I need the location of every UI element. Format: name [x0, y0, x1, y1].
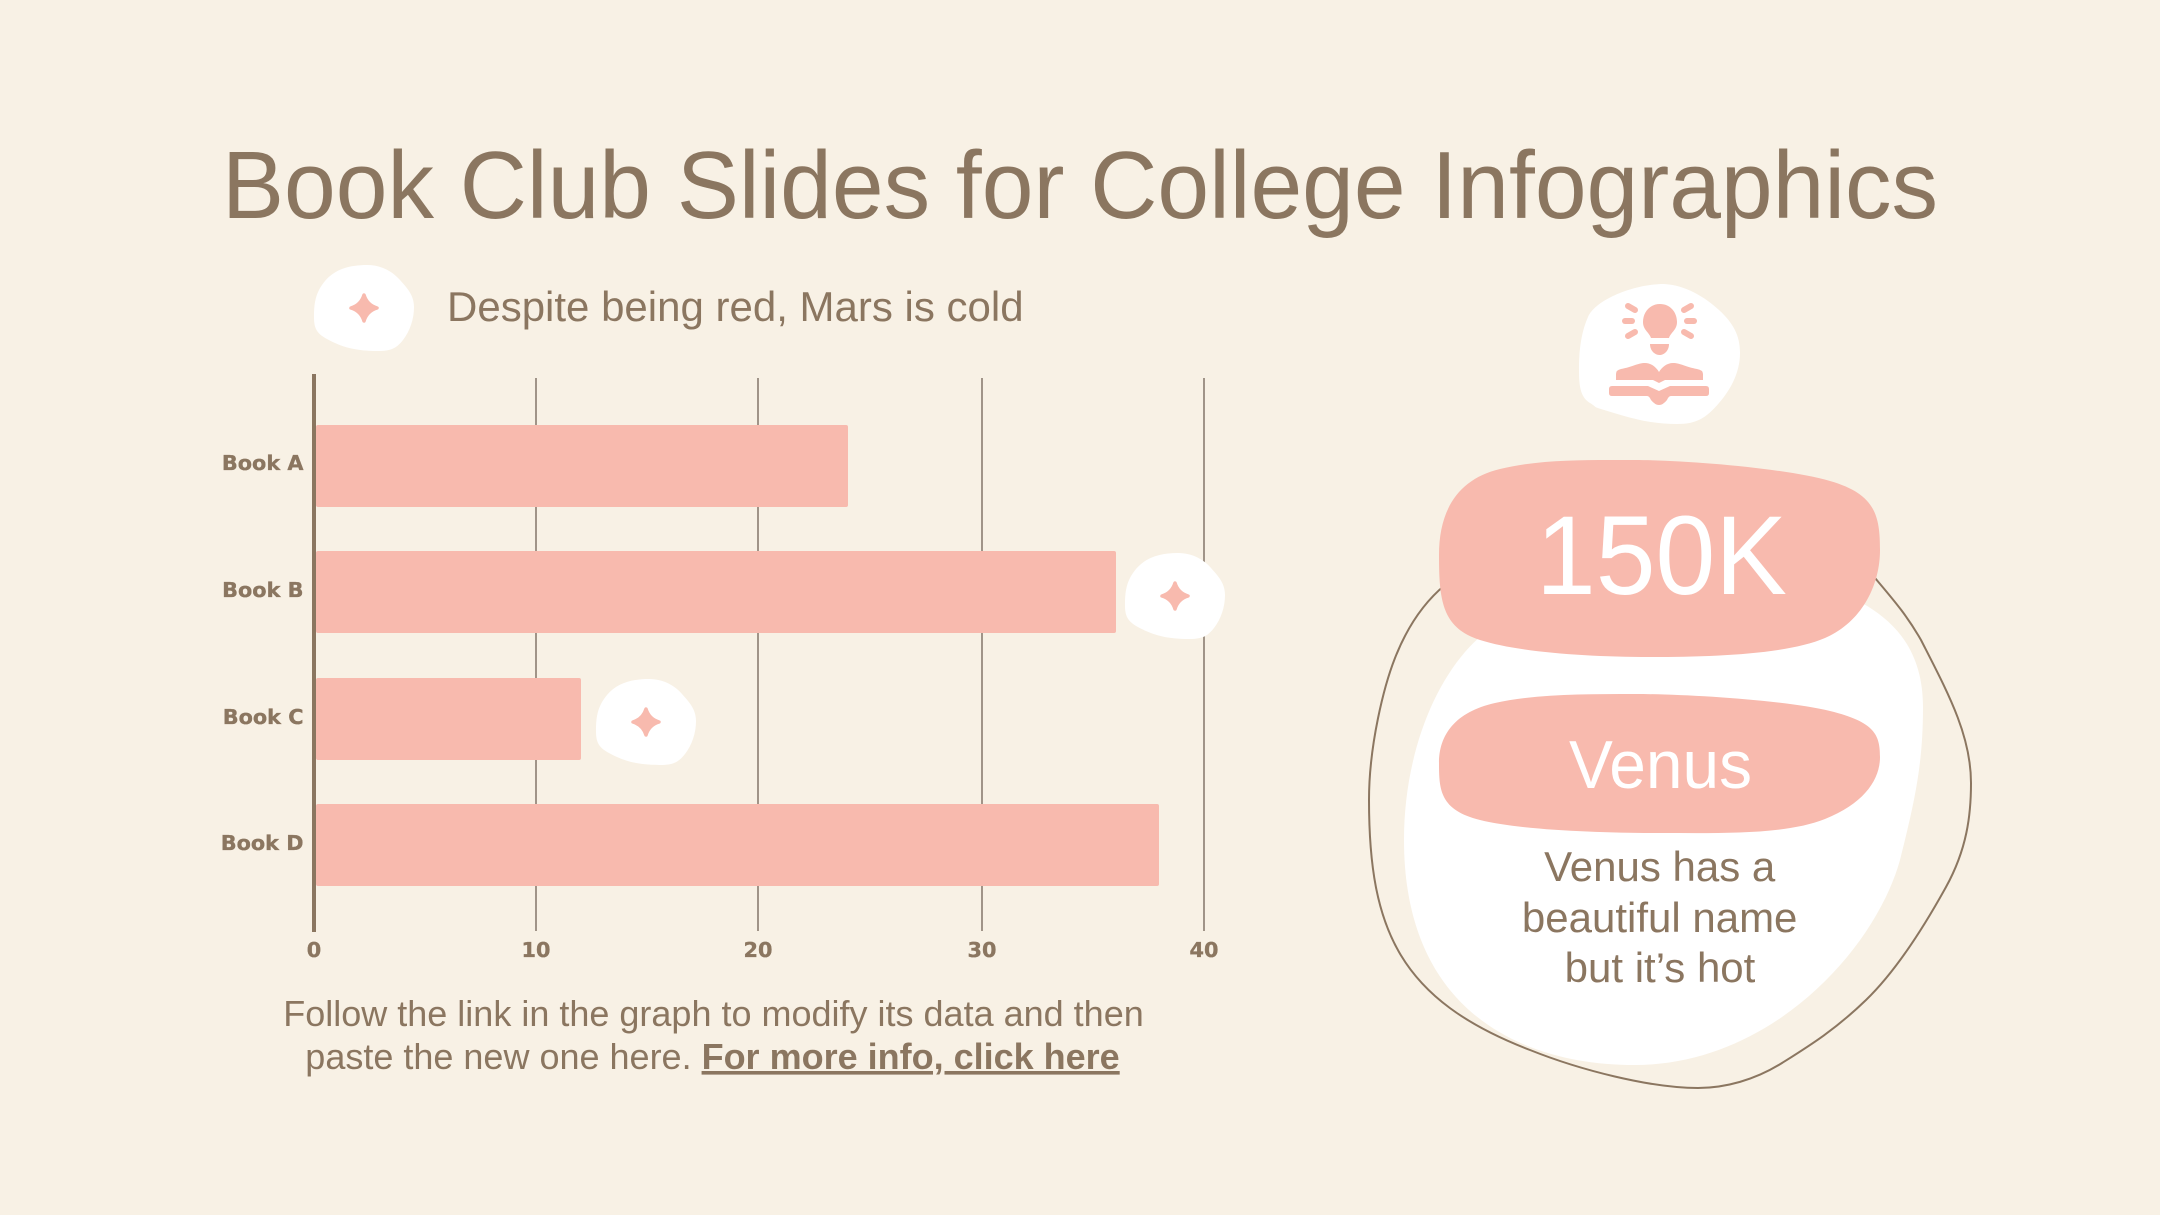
bulb — [1643, 304, 1677, 355]
icon: lightbulb over open book — [1579, 284, 1740, 424]
bar: Book D — [316, 804, 1159, 886]
name pill: Venus — [1439, 694, 1880, 833]
bulb rays — [1625, 306, 1694, 336]
outline blob — [1369, 572, 1971, 1088]
title: Book Club Slides for College Infographics — [222, 132, 1938, 239]
category labels — [221, 451, 304, 855]
bar chart — [221, 374, 1225, 962]
y axis — [312, 374, 316, 932]
Venus description: beautiful name — [1522, 894, 1797, 941]
bar: Book B — [316, 551, 1116, 633]
stat pill: 150K — [1439, 460, 1880, 657]
chart note: Follow the link in the graph to modify its data and then — [283, 993, 1144, 1034]
bar: Book C — [316, 678, 581, 760]
axis values: 40 — [1190, 938, 1218, 962]
panel: Venus stat — [1369, 460, 1971, 1088]
icon: Book C star blob — [596, 679, 696, 765]
grid lines — [536, 378, 1204, 931]
category labels: Book D — [221, 831, 304, 855]
axis values: 30 — [968, 938, 996, 962]
icon: legend star blob — [314, 265, 414, 351]
axis values — [307, 938, 1218, 962]
white blob backdrop — [1404, 589, 1923, 1065]
category labels: Book A — [222, 451, 304, 475]
icon backdrop blob — [1579, 284, 1740, 424]
name pill: Venus: Venus — [1569, 727, 1752, 803]
Venus description: Venus has a — [1544, 843, 1776, 890]
icon: Book B star blob — [1125, 553, 1225, 639]
category labels: Book C — [223, 705, 304, 729]
category labels: Book B — [222, 578, 304, 602]
axis values: 0 — [307, 938, 321, 962]
legend text: Despite being red, Mars is cold — [447, 283, 1024, 330]
Venus description: but it’s hot — [1565, 944, 1756, 991]
bar: Book A — [316, 425, 848, 507]
stat pill: 150K: 150K — [1536, 493, 1787, 618]
axis values: 20 — [744, 938, 772, 962]
chart note: paste the new one here. For more info, click here — [305, 1036, 1120, 1077]
open book — [1609, 363, 1709, 405]
axis values: 10 — [522, 938, 550, 962]
legend: Mars note — [314, 265, 1024, 351]
